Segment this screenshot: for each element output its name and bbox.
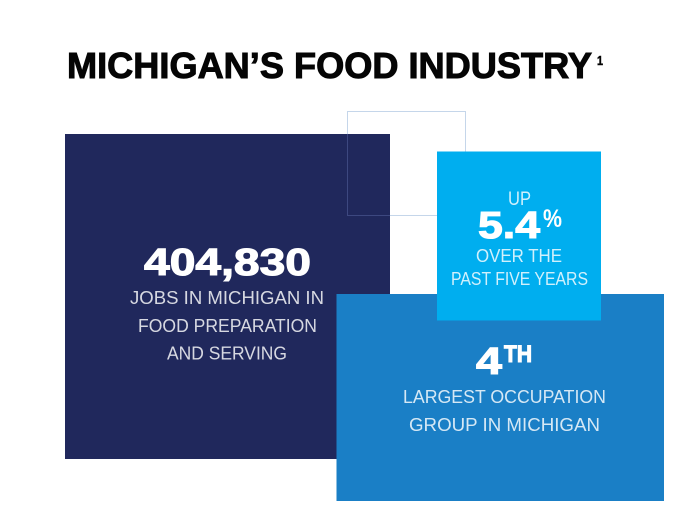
panel: occupation rank	[336, 294, 664, 501]
title: MICHIGAN’S FOOD INDUSTRY	[67, 45, 592, 86]
text: growth description: PAST FIVE YEARS	[451, 268, 588, 289]
text: occupation description: GROUP IN MICHIGAN	[409, 414, 600, 435]
text: growth description	[451, 245, 588, 289]
stat: 5.4%: 5.4	[478, 205, 540, 247]
stat: 4th: 4	[476, 341, 502, 383]
text: jobs description: FOOD PREPARATION	[138, 315, 317, 336]
text: jobs description: AND SERVING	[167, 342, 287, 364]
stat: 5.4%	[478, 205, 562, 247]
decorative outlined square	[348, 112, 466, 216]
panel: growth	[437, 152, 601, 320]
stat: 5.4%: %	[543, 205, 562, 233]
stat: 4th: TH	[504, 341, 532, 368]
text: occupation description: LARGEST OCCUPATION	[403, 386, 606, 407]
stat: 4th	[476, 341, 532, 383]
text: up: UP	[508, 189, 531, 210]
title: 1	[597, 53, 603, 68]
text: jobs description: JOBS IN MICHIGAN IN	[130, 287, 324, 308]
panel: jobs	[65, 134, 390, 459]
text: jobs description	[130, 287, 324, 364]
text: occupation description	[403, 386, 606, 435]
text: growth description: OVER THE	[476, 245, 562, 266]
stat: 404,830: 404,830	[144, 242, 311, 284]
